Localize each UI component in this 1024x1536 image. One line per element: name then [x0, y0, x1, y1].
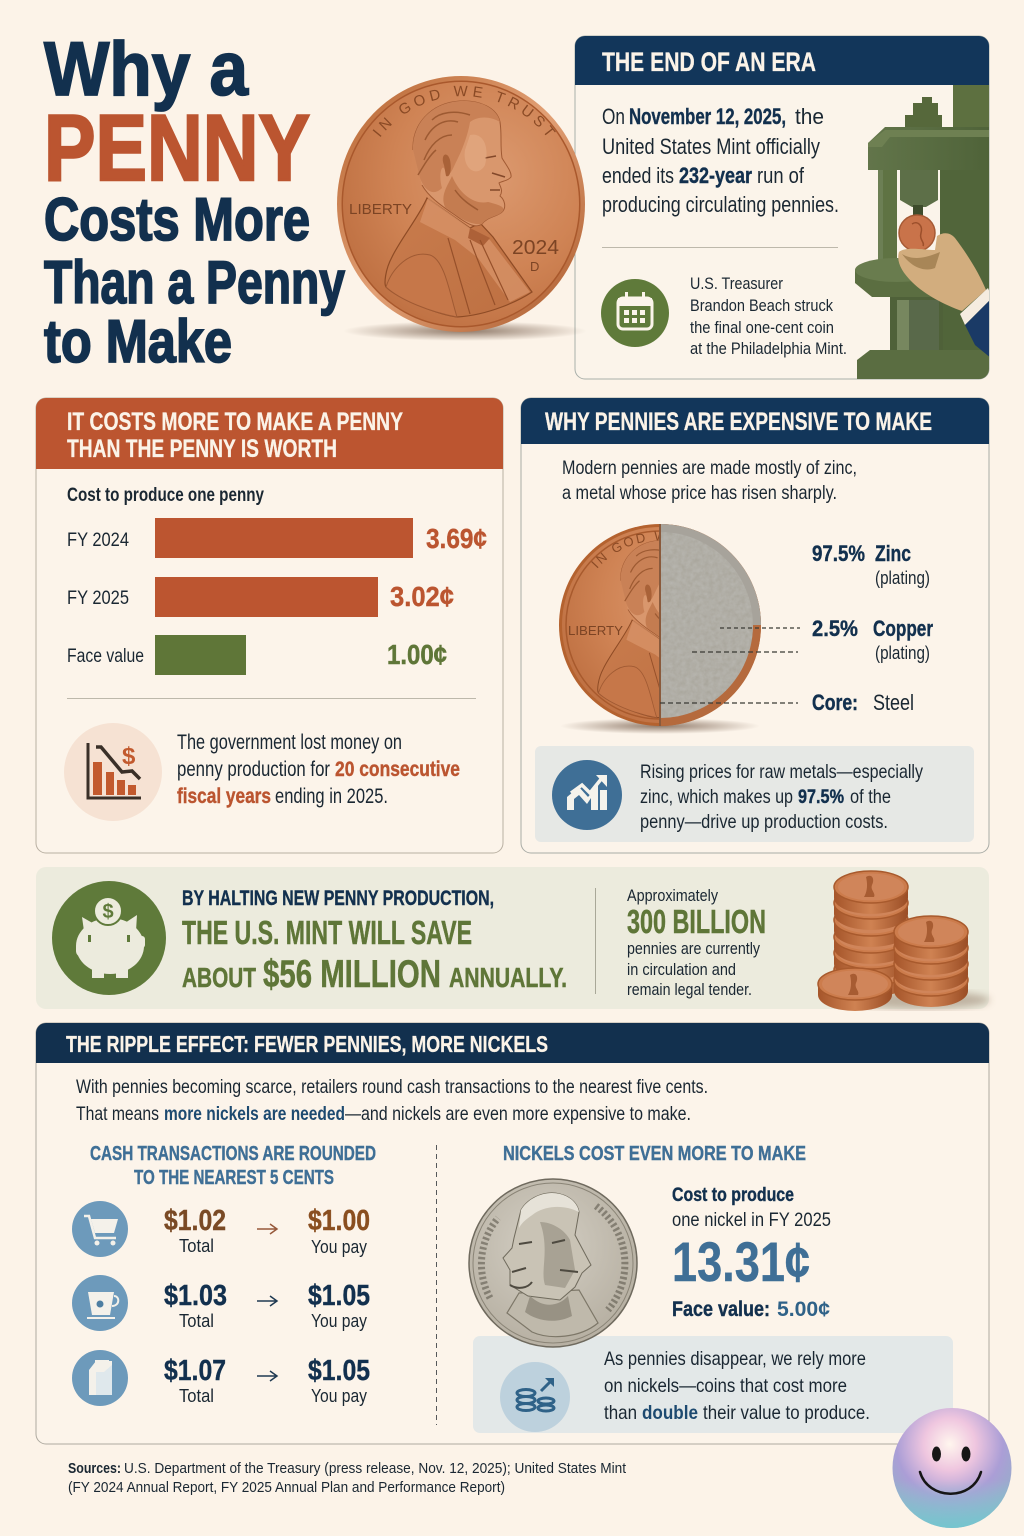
text: savings headline: $56 MILLION [263, 953, 441, 996]
row: $1.07 rounds to $1.05: $1.07 [164, 1355, 226, 1387]
composition labels: 2.5% [812, 616, 858, 641]
icon: piggy bank [52, 881, 166, 995]
text: relying on nickels [604, 1348, 870, 1424]
title: Why a [44, 27, 249, 112]
sources [68, 1460, 627, 1496]
coin cross-section: LIBERTY [568, 623, 623, 638]
text: 300 billion pennies: 300 BILLION [627, 903, 766, 940]
text: 300 billion pennies: remain legal tender. [627, 981, 752, 999]
text: twenty years of losses: The government lost money on [177, 731, 402, 754]
composition labels [812, 541, 933, 715]
title: PENNY [44, 95, 310, 200]
row: $1.03 rounds to $1.05: Total [179, 1311, 214, 1331]
sources: Sources: [68, 1460, 121, 1477]
text: ripple intro [76, 1077, 708, 1125]
text: savings headline [182, 887, 567, 996]
coin cross-section [559, 524, 800, 734]
hero penny coin: D [530, 259, 539, 274]
row: $1.03 rounds to $1.05: $1.03 [164, 1280, 227, 1312]
composition labels: (plating) [875, 568, 930, 588]
text: 300 billion pennies: pennies are currently [627, 940, 761, 958]
text: end of production: United States Mint officially [602, 134, 820, 159]
hero penny coin [337, 76, 585, 340]
composition labels: Steel [873, 690, 914, 715]
row: $1.03 rounds to $1.05: You pay [311, 1311, 367, 1331]
text: rising metal prices: penny—drive up production costs. [640, 811, 888, 833]
bar chart: 3.69¢ [426, 523, 487, 554]
row: $1.03 rounds to $1.05 [72, 1275, 370, 1331]
arrow [257, 1371, 277, 1381]
text: 300 billion pennies: in circulation and [627, 961, 736, 979]
callout: relying on nickels [473, 1336, 953, 1433]
text: relying on nickels: double [642, 1402, 698, 1424]
bar chart: 3.02¢ [390, 581, 454, 612]
heading: rounded cash transactions: TO THE NEAREST 5 CENTS [134, 1167, 334, 1189]
composition labels: Copper [873, 616, 933, 641]
text: rising metal prices: zinc, which makes up [640, 786, 793, 808]
icon: shopping cart [72, 1201, 128, 1257]
header: costs more than worth: IT COSTS MORE TO MAKE A PENNY [67, 408, 403, 436]
text: nickel production cost: 5.00¢ [777, 1298, 830, 1321]
header: ripple effect: THE RIPPLE EFFECT: FEWER PENNIES, MORE NICKELS [66, 1031, 548, 1057]
header: ripple effect [36, 1023, 989, 1063]
text: final coin: U.S. Treasurer [690, 274, 783, 293]
text: relying on nickels: their value to produce. [703, 1402, 870, 1424]
text: end of production: On [602, 104, 625, 129]
row: $1.02 rounds to $1.00: $1.00 [308, 1205, 370, 1237]
text: twenty years of losses: fiscal years [177, 785, 271, 808]
text: relying on nickels: on nickels—coins that cost more [604, 1375, 847, 1397]
bar chart [67, 518, 487, 675]
text: final coin: at the Philadelphia Mint. [690, 339, 847, 358]
text: nickel production cost [672, 1185, 831, 1321]
text: savings headline: ABOUT [182, 962, 256, 993]
sources: (FY 2024 Annual Report, FY 2025 Annual Plan and Performance Report) [68, 1479, 505, 1496]
header: costs more than worth: THAN THE PENNY IS WORTH [67, 435, 337, 463]
coin cross-section: IN GOD WE [591, 532, 659, 568]
text: nickel production cost: Cost to produce [672, 1185, 794, 1206]
text: relying on nickels: than [604, 1402, 637, 1424]
icon: milk carton [72, 1350, 128, 1406]
text: ripple intro: —and nickels are even more expensive to make. [345, 1104, 691, 1125]
icon: rising chart [552, 760, 622, 830]
text: rising metal prices: Rising prices for raw metals—especially [640, 761, 923, 783]
bar chart: FY 2025 [67, 588, 129, 609]
header: the end of an era: THE END OF AN ERA [602, 47, 816, 77]
text: rising metal prices: of the [850, 786, 891, 808]
text: end of production: run of [757, 163, 805, 188]
chart title: Cost to produce one penny [67, 485, 264, 506]
text: twenty years of losses [177, 731, 460, 808]
icon: falling cost chart [64, 723, 162, 821]
text: twenty years of losses: 20 consecutive [335, 758, 460, 781]
header: the end of an era [575, 36, 989, 85]
text: modern pennies [562, 458, 857, 504]
bar chart: FY 2024 [67, 530, 129, 551]
heading: rounded cash transactions: CASH TRANSACTIONS ARE ROUNDED [90, 1143, 376, 1165]
badge: smiley sphere [892, 1408, 1012, 1528]
row: $1.02 rounds to $1.00 [72, 1201, 370, 1257]
title: Costs More [44, 186, 310, 253]
text: twenty years of losses: penny production for [177, 758, 330, 781]
illustration: stacks of pennies [818, 871, 990, 1011]
heading: rounded cash transactions [90, 1143, 376, 1189]
row: $1.07 rounds to $1.05: $1.05 [308, 1355, 370, 1387]
composition labels: Zinc [875, 541, 911, 566]
header: costs more than worth [36, 398, 503, 469]
row: $1.03 rounds to $1.05: $1.05 [308, 1280, 370, 1312]
text: end of production: November 12, 2025, [629, 104, 786, 129]
heading: nickels cost more: NICKELS COST EVEN MORE TO MAKE [503, 1143, 806, 1165]
composition labels: (plating) [875, 643, 930, 663]
text: savings headline: BY HALTING NEW PENNY PRODUCTION, [182, 887, 494, 910]
hero penny coin: IN GOD WE TRUST [372, 86, 556, 137]
text: final coin: the final one-cent coin [690, 318, 834, 337]
composition labels: 97.5% [812, 541, 865, 566]
arrow [257, 1296, 277, 1306]
icon: coin stack with arrow [500, 1362, 570, 1432]
header: why pennies are expensive [521, 398, 989, 444]
text: ripple intro: With pennies becoming scarce, retailers round cash transactions to the nearest five cents. [76, 1077, 708, 1098]
text: savings headline: ANNUALLY. [449, 962, 567, 993]
text: ripple intro: more nickels are needed [164, 1104, 345, 1125]
text: end of production: the [795, 104, 824, 129]
banner: savings [36, 867, 990, 1011]
icon: piggy bank: $ [102, 901, 114, 923]
bar chart: Face value [67, 646, 144, 667]
callout: rising metal prices [535, 746, 974, 842]
composition labels: Core: [812, 690, 858, 715]
text: twenty years of losses: ending in 2025. [275, 785, 388, 808]
text: modern pennies: Modern pennies are made mostly of zinc, [562, 458, 857, 479]
bar chart: 1.00¢ [387, 639, 447, 670]
arrow [257, 1224, 277, 1234]
text: nickel production cost: Face value: [672, 1298, 770, 1321]
text: savings headline: THE U.S. MINT WILL SAVE [182, 914, 472, 951]
panel: why pennies are expensive [520, 398, 990, 854]
text: rising metal prices: 97.5% [798, 786, 844, 808]
text: nickel production cost: 13.31¢ [672, 1230, 810, 1293]
row: $1.07 rounds to $1.05: You pay [311, 1386, 367, 1406]
text: modern pennies: a metal whose price has risen sharply. [562, 483, 837, 504]
text: 300 billion pennies [627, 887, 766, 999]
text: end of production: producing circulating pennies. [602, 192, 839, 217]
hero penny coin: LIBERTY [349, 201, 412, 218]
row: $1.02 rounds to $1.00: You pay [311, 1237, 367, 1257]
icon: calendar [601, 279, 669, 347]
title: Than a Penny [44, 249, 345, 316]
icon: coffee cup [72, 1275, 128, 1331]
text: ripple intro: That means [76, 1104, 159, 1125]
title [44, 27, 345, 375]
panel: the end of an era [575, 36, 992, 379]
panel: cost to make a penny [36, 398, 503, 853]
title: to Make [44, 308, 232, 375]
text: final coin: Brandon Beach struck [690, 296, 833, 315]
text: end of production [602, 104, 839, 217]
text: end of production: ended its [602, 163, 674, 188]
panel: the ripple effect [36, 1023, 989, 1444]
text: end of production: 232-year [679, 163, 752, 188]
text: relying on nickels: As pennies disappear, we rely more [604, 1348, 866, 1370]
nickel coin [469, 1179, 637, 1347]
row: $1.07 rounds to $1.05 [72, 1350, 370, 1406]
sources: U.S. Department of the Treasury (press release, Nov. 12, 2025); United States Mint [124, 1460, 627, 1477]
row: $1.02 rounds to $1.00: $1.02 [164, 1205, 226, 1237]
row: $1.07 rounds to $1.05: Total [179, 1386, 214, 1406]
hero penny coin: 2024 [512, 237, 559, 259]
row: $1.02 rounds to $1.00: Total [179, 1236, 214, 1256]
icon: falling cost chart: $ [122, 743, 136, 770]
illustration: coin press with hand [855, 85, 992, 379]
text: rising metal prices [640, 761, 923, 833]
text: final coin [690, 274, 847, 358]
text: 300 billion pennies: Approximately [627, 887, 719, 905]
text: nickel production cost: one nickel in FY 2025 [672, 1210, 831, 1231]
